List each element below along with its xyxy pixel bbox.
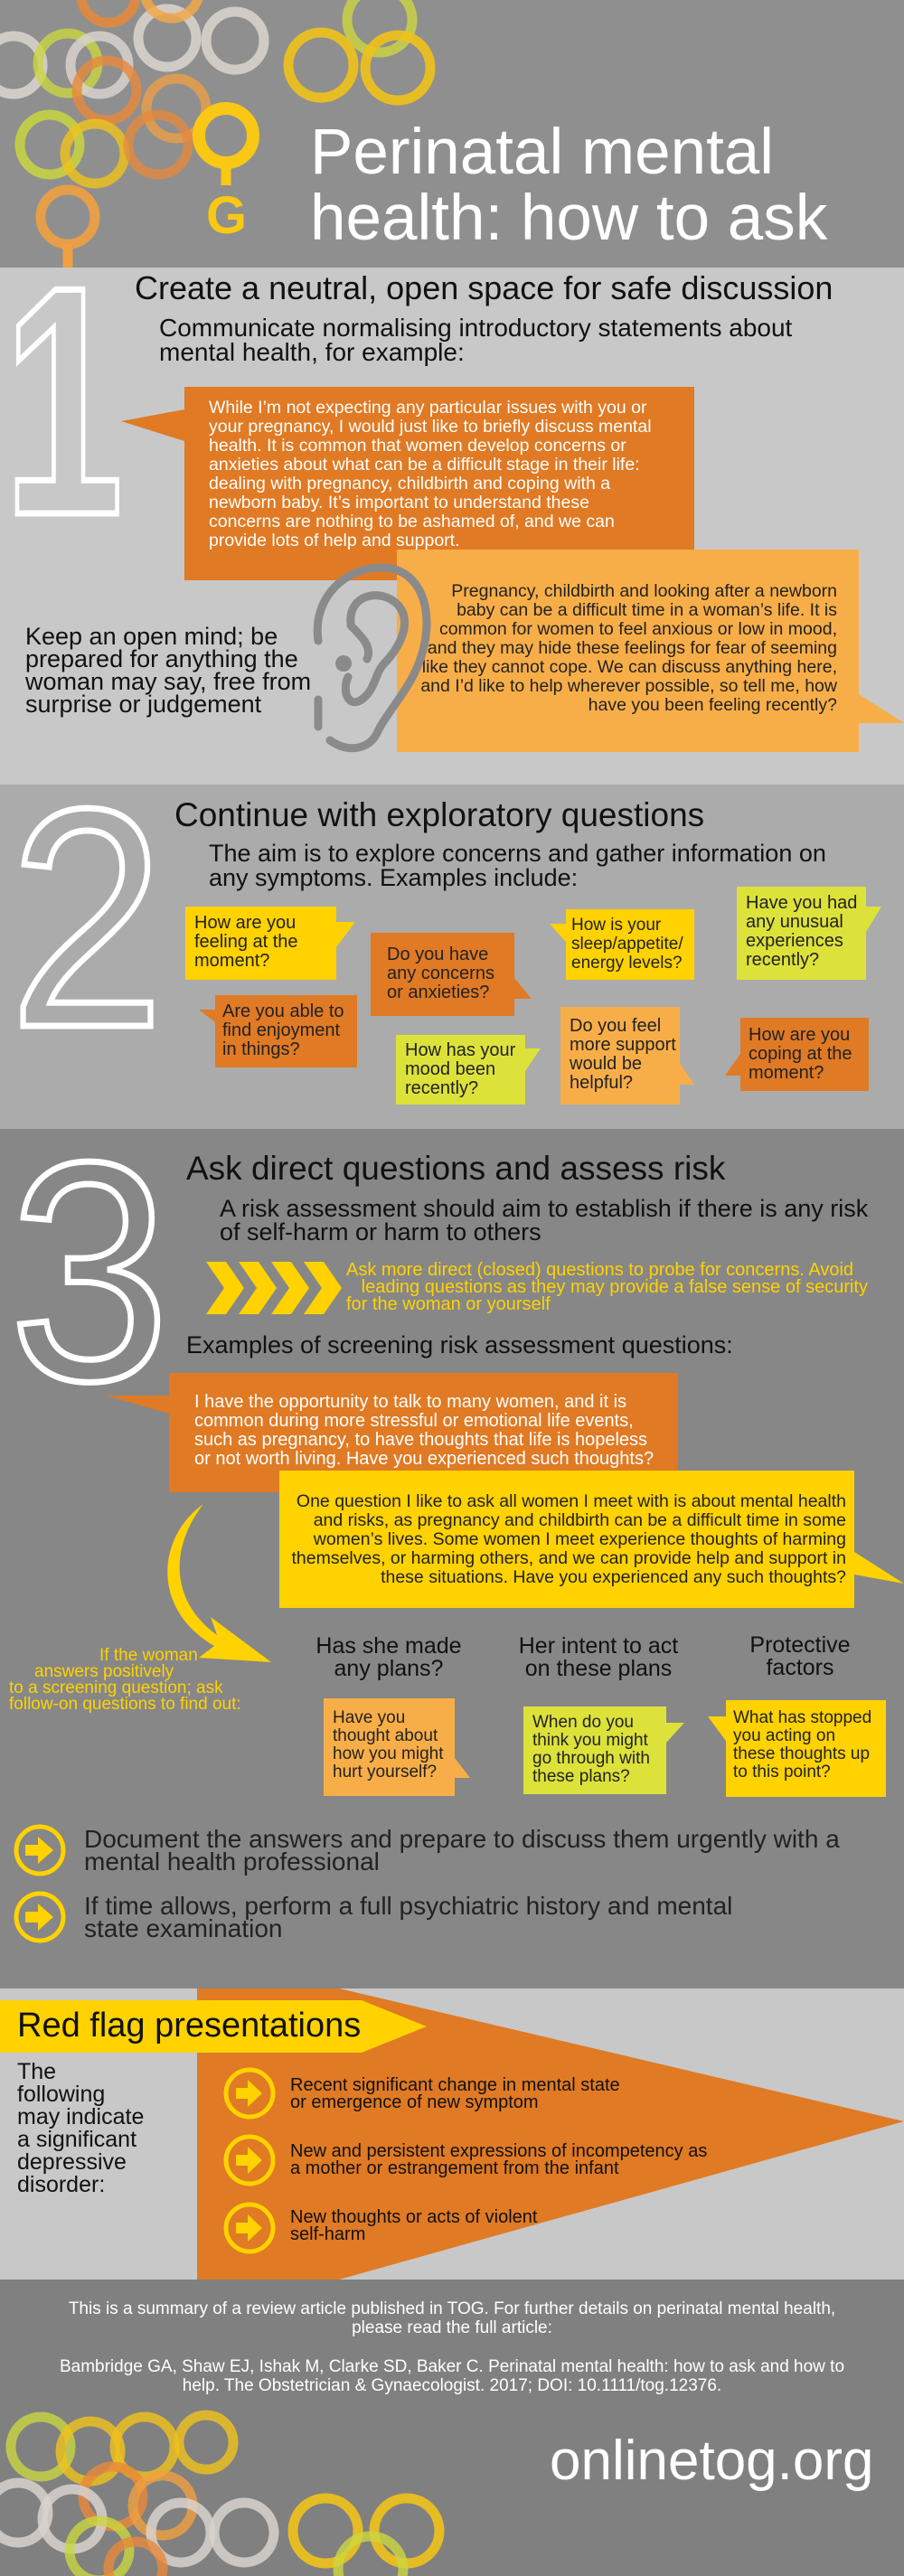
red flag intro text: The (17, 2059, 56, 2084)
orange speech bubble: anxieties about what can be a difficult stage in their life: (209, 455, 640, 475)
bubble: support: helpful? (570, 1073, 633, 1093)
bubble: concerns (371, 933, 532, 1016)
bubble: mood: recently? (405, 1078, 478, 1098)
bubble: coping: coping at the (749, 1044, 852, 1064)
direct questions note: Ask more direct (closed) questions to probe for concerns. Avoid (346, 1260, 853, 1280)
bubble: go through: these plans? (532, 1767, 630, 1786)
icon: ear (313, 563, 430, 752)
column heading plans: any plans? (334, 1656, 443, 1681)
red flag intro text: depressive (17, 2149, 127, 2175)
orange screening bubble (107, 1373, 678, 1492)
bubble: support: more support (570, 1035, 676, 1055)
red flag item 3 (222, 2201, 783, 2255)
intro text: mental health, for example: (159, 338, 465, 366)
bubble: unusual: recently? (746, 950, 819, 970)
red flag item 2: a mother or estrangement from the infant (290, 2158, 619, 2178)
citation (0, 2357, 904, 2395)
yellow screening bubble: themselves, or harming others, and we can provide help and support in (291, 1548, 846, 1568)
bubble: stopped you (708, 1700, 886, 1797)
orange triangle (197, 1988, 904, 2280)
bubble: mood: mood been (405, 1059, 495, 1079)
follow-on note: follow-on questions to find out: (9, 1695, 241, 1714)
icon: arrow circle (14, 1824, 65, 1876)
open mind text: Keep an open mind; be (25, 623, 278, 650)
bubble: go through: think you might (532, 1731, 648, 1750)
bubble: go through: When do you (532, 1713, 634, 1732)
column heading protective (749, 1632, 851, 1680)
bubble: concerns: any concerns (387, 964, 494, 983)
bubble: mood (396, 1035, 541, 1105)
bubble: support: would be (570, 1054, 642, 1074)
title: Perinatal mental (310, 117, 774, 188)
orange screening bubble: such as pregnancy, to have thoughts that life is hopeless (194, 1430, 647, 1450)
orange speech bubble (121, 387, 694, 580)
bubble: feeling (185, 907, 355, 980)
yellow screening bubble: these situations. Have you experienced any such thoughts? (381, 1567, 846, 1587)
follow-on note: answers positively (34, 1662, 174, 1681)
footer summary text (0, 2299, 904, 2337)
bubble: unusual: any unusual (746, 912, 843, 932)
bubble: support: Do you feel (570, 1016, 661, 1036)
logo letter G: G (206, 186, 247, 245)
action: document answers (14, 1824, 840, 1876)
bubble: hurt yourself: hurt yourself? (333, 1763, 437, 1782)
orange speech bubble: concerns are nothing to be ashamed of, and we can (209, 512, 615, 531)
section 3 (0, 1129, 904, 1988)
light orange speech bubble: and I’d like to help wherever possible, so tell me, how (420, 676, 837, 696)
action: psychiatric history: state examination (84, 1914, 282, 1942)
red flag item 1 (224, 2068, 620, 2119)
bubble: stopped you: you acting on (733, 1726, 835, 1745)
heading 1: Create a neutral, open space for safe discussion (135, 269, 833, 306)
bubble: go through: go through with (532, 1749, 650, 1768)
bubble: unusual (737, 887, 881, 980)
bubble: go through (523, 1706, 684, 1794)
direct questions note: leading questions as they may provide a false sense of security (362, 1277, 868, 1297)
light orange speech bubble: baby can be a difficult time in a woman’s life. It is (457, 600, 837, 620)
bubble: sleep: sleep/appetite/ (571, 935, 683, 954)
red flag intro text: a significant (17, 2127, 137, 2152)
numeral 3 outline: 3 (9, 1098, 170, 1446)
risk intro (220, 1195, 868, 1246)
bubble: feeling: moment? (194, 951, 269, 971)
orange screening bubble: or not worth living. Have you experienced such thoughts? (194, 1449, 654, 1469)
action: psychiatric history: If time allows, perform a full psychiatric history and mental (84, 1892, 732, 1920)
yellow screening bubble: One question I like to ask all women I meet with is about mental health (297, 1491, 846, 1511)
open mind text (25, 623, 311, 718)
decorative rings footer (0, 2280, 506, 2576)
bubble: enjoyment (199, 995, 357, 1067)
column heading protective: factors (766, 1655, 834, 1680)
red flag section (0, 1988, 904, 2280)
red flag item 3: self-harm (290, 2224, 365, 2244)
orange screening bubble: common during more stressful or emotional life events, (194, 1411, 634, 1431)
yellow screening bubble: and risks, as pregnancy and childbirth can be a difficult time in some (314, 1510, 846, 1530)
intro text: Communicate normalising introductory statements about (159, 314, 792, 342)
red flag item 3: New thoughts or acts of violent (290, 2207, 537, 2227)
light orange speech bubble: and they may hide these feelings for fear of seeming (428, 638, 837, 658)
light orange speech bubble (397, 550, 904, 752)
direct questions note: for the woman or yourself (346, 1294, 551, 1314)
intro text 2: any symptoms. Examples include: (209, 864, 578, 891)
bubble: enjoyment: in things? (222, 1039, 300, 1059)
title (310, 117, 828, 254)
yellow screening bubble (279, 1471, 904, 1608)
bubble: concerns: Do you have (387, 945, 488, 964)
decorative rings (0, 0, 436, 268)
citation: Bambridge GA, Shaw EJ, Ishak M, Clarke SD, Baker C. Perinatal mental health: how to ask and how to (60, 2357, 844, 2376)
action: document answers: mental health professional (84, 1847, 380, 1876)
column heading plans: Has she made (315, 1633, 462, 1659)
light orange speech bubble: have you been feeling recently? (589, 695, 837, 715)
bubble: support (560, 1007, 694, 1105)
header band (0, 0, 904, 268)
orange speech bubble: newborn baby. It’s important to understand these (209, 493, 589, 512)
footer (0, 2280, 904, 2576)
orange speech bubble: While I’m not expecting any particular issues with you or (209, 398, 646, 418)
action: psychiatric history (14, 1891, 732, 1943)
open mind text: prepared for anything the (25, 645, 298, 672)
numeral 2 outline: 2 (9, 745, 165, 1093)
icon: arrow circle (222, 2201, 277, 2255)
bubble: hurt yourself: Have you (333, 1708, 405, 1727)
red flag banner (0, 2000, 427, 2053)
bubble: stopped you: What has stopped (733, 1708, 871, 1727)
icon: chevrons (206, 1262, 342, 1314)
column heading plans (315, 1633, 462, 1681)
column heading intent: Her intent to act (519, 1633, 678, 1659)
bubble: feeling: feeling at the (194, 932, 298, 952)
title: health: how to ask (310, 183, 827, 254)
open mind text: woman may say, free from (25, 668, 311, 695)
red flag item 1: Recent significant change in mental state (290, 2075, 620, 2095)
red flag intro text (17, 2059, 144, 2197)
citation: help. The Obstetrician & Gynaecologist. 2017; DOI: 10.1111/tog.12376. (183, 2376, 721, 2395)
intro text 2: The aim is to explore concerns and gather information on (209, 840, 826, 867)
light orange speech bubble: common for women to feel anxious or low in mood, (439, 619, 837, 639)
action: document answers: Document the answers and prepare to discuss them urgently with a (84, 1825, 840, 1853)
risk intro: of self-harm or harm to others (220, 1218, 541, 1246)
icon: arrow circle (222, 2133, 277, 2187)
red flag intro text: following (17, 2082, 105, 2107)
yellow screening bubble: women’s lives. Some women I meet experience thoughts of harming (314, 1529, 846, 1549)
orange screening bubble: I have the opportunity to talk to many women, and it is (194, 1392, 626, 1412)
red flag intro text: disorder: (17, 2172, 105, 2197)
bubble: sleep: energy levels? (571, 954, 683, 973)
icon: arrow circle (222, 2066, 277, 2120)
orange speech bubble: dealing with pregnancy, childbirth and coping with a (209, 474, 610, 494)
column heading protective: Protective (749, 1632, 851, 1658)
orange speech bubble: your pregnancy, I would just like to briefly discuss mental (209, 417, 652, 437)
bubble: hurt yourself: how you might (333, 1744, 444, 1763)
bubble: sleep: How is your (571, 916, 661, 935)
risk intro: A risk assessment should aim to establish if there is any risk (220, 1195, 868, 1222)
bubble: coping: How are you (749, 1025, 850, 1045)
heading 3: Ask direct questions and assess risk (186, 1150, 725, 1187)
bubble: stopped you: to this point? (733, 1763, 831, 1782)
direct questions note (346, 1260, 868, 1314)
bubble: feeling: How are you (194, 913, 296, 933)
heading 2: Continue with exploratory questions (174, 796, 704, 833)
follow-on note (9, 1646, 241, 1714)
light orange speech bubble: like they cannot cope. We can discuss anything here, (422, 657, 837, 677)
red flag item 1: or emergence of new symptom (290, 2092, 539, 2112)
screening examples heading: Examples of screening risk assessment questions: (186, 1331, 733, 1359)
footer summary text: please read the full article: (352, 2318, 552, 2337)
bubble: hurt yourself (324, 1698, 470, 1796)
intro text (159, 314, 792, 366)
column heading intent (519, 1633, 678, 1681)
light orange speech bubble: Pregnancy, childbirth and looking after a newborn (451, 581, 837, 601)
red flag item 2: New and persistent expressions of incompetency as (290, 2141, 707, 2161)
column heading intent: on these plans (525, 1656, 672, 1681)
red flag item 2 (222, 2133, 783, 2187)
intro text 2 (209, 840, 826, 891)
bubble: coping: moment? (749, 1063, 824, 1083)
bubble: unusual: Have you had (746, 893, 857, 913)
follow-on note: to a screening question; ask (9, 1678, 223, 1697)
bubble: enjoyment: find enjoyment (222, 1020, 340, 1040)
section 2 (0, 785, 904, 1129)
orange speech bubble: health. It is common that women develop concerns or (209, 436, 626, 456)
red flag intro text: may indicate (17, 2104, 144, 2129)
bubble: sleep (550, 909, 694, 980)
open mind text: surprise or judgement (25, 691, 261, 718)
bubble: enjoyment: Are you able to (222, 1001, 344, 1021)
follow-on note: If the woman (99, 1646, 198, 1665)
bubble: mood: How has your (405, 1040, 515, 1060)
bubble: hurt yourself: thought about (333, 1726, 438, 1745)
bubble: concerns: or anxieties? (387, 982, 489, 1002)
bubble: unusual: experiences (746, 931, 843, 951)
footer summary text: This is a summary of a review article published in TOG. For further details on perinatal mental health, (69, 2299, 835, 2318)
red flag banner: Red flag presentations (17, 2007, 361, 2045)
website url: onlinetog.org (550, 2430, 873, 2492)
numeral 1 outline: 1 (4, 219, 123, 583)
curved arrow (167, 1504, 271, 1662)
orange speech bubble: provide lots of help and support. (209, 531, 460, 550)
bubble: stopped you: these thoughts up (733, 1744, 870, 1763)
section 1 (0, 268, 904, 785)
bubble: coping (725, 1018, 869, 1091)
icon: arrow circle (14, 1891, 65, 1943)
